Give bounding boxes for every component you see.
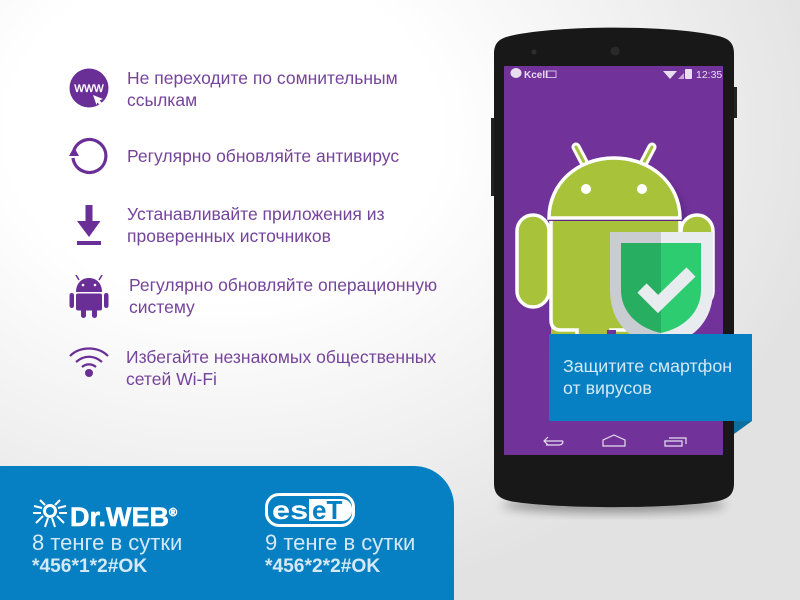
tip text: suspicious links xyxy=(127,68,398,110)
callout text: от вирусов xyxy=(563,378,652,398)
status bar xyxy=(510,68,722,81)
tip text: install apps xyxy=(127,204,384,246)
tip text: update OS: Регулярно обновляйте операционную xyxy=(129,275,437,295)
tip text: public wifi: сетей Wi-Fi xyxy=(126,369,217,389)
tip icon: refresh xyxy=(69,138,108,174)
tip text: install apps: проверенных источников xyxy=(127,226,331,246)
ESET code: *456*2*2#OK xyxy=(265,556,380,577)
camera and sensor xyxy=(532,46,620,56)
tip icon: www link xyxy=(70,68,108,108)
tip text: suspicious links: Не переходите по сомнительным xyxy=(127,68,398,88)
phone body xyxy=(494,28,734,507)
tip text: suspicious links: ссылкам xyxy=(127,90,197,110)
side buttons xyxy=(491,87,737,196)
android robot xyxy=(517,147,713,345)
ESET price: 9 тенге в сутки xyxy=(265,530,415,555)
tip text: update antivirus: Регулярно обновляйте антивирус xyxy=(127,146,399,166)
Dr.WEB logo: Dr.WEB® xyxy=(70,502,177,532)
eyes xyxy=(581,184,591,194)
tip text: install apps: Устанавливайте приложения из xyxy=(127,204,384,224)
tip icon: wifi xyxy=(69,347,109,377)
android shadow xyxy=(553,165,686,345)
phone xyxy=(491,28,752,519)
phone shadow xyxy=(502,497,726,513)
tip text: update OS: систему xyxy=(129,297,195,317)
Dr.WEB logo xyxy=(33,499,178,532)
head xyxy=(549,158,680,218)
ESET logo: es xyxy=(272,495,308,525)
Dr.WEB price: 8 тенге в сутки xyxy=(32,530,182,555)
body xyxy=(551,221,679,340)
arms xyxy=(517,215,549,307)
Dr.WEB code: *456*1*2#OK xyxy=(32,556,147,577)
tip text: public wifi xyxy=(126,347,436,389)
callout text: Защитите смартфон xyxy=(563,356,732,376)
status bar: 12:35 xyxy=(696,69,722,81)
shield xyxy=(610,232,713,340)
tip icon: www link: www xyxy=(73,80,104,95)
nav buttons xyxy=(544,435,686,446)
tip text: update OS xyxy=(129,275,437,317)
callout box xyxy=(549,334,752,421)
ESET logo xyxy=(265,493,355,527)
callout fold xyxy=(734,421,752,434)
tip text: public wifi: Избегайте незнакомых общественных xyxy=(126,347,436,367)
screen xyxy=(504,66,723,455)
antennae xyxy=(576,147,652,166)
tip icon: download xyxy=(77,205,101,245)
bottom panel xyxy=(0,466,454,600)
tip icon: android xyxy=(70,275,108,318)
ESET logo: eT xyxy=(312,495,342,525)
status bar: Kcell xyxy=(524,70,548,81)
